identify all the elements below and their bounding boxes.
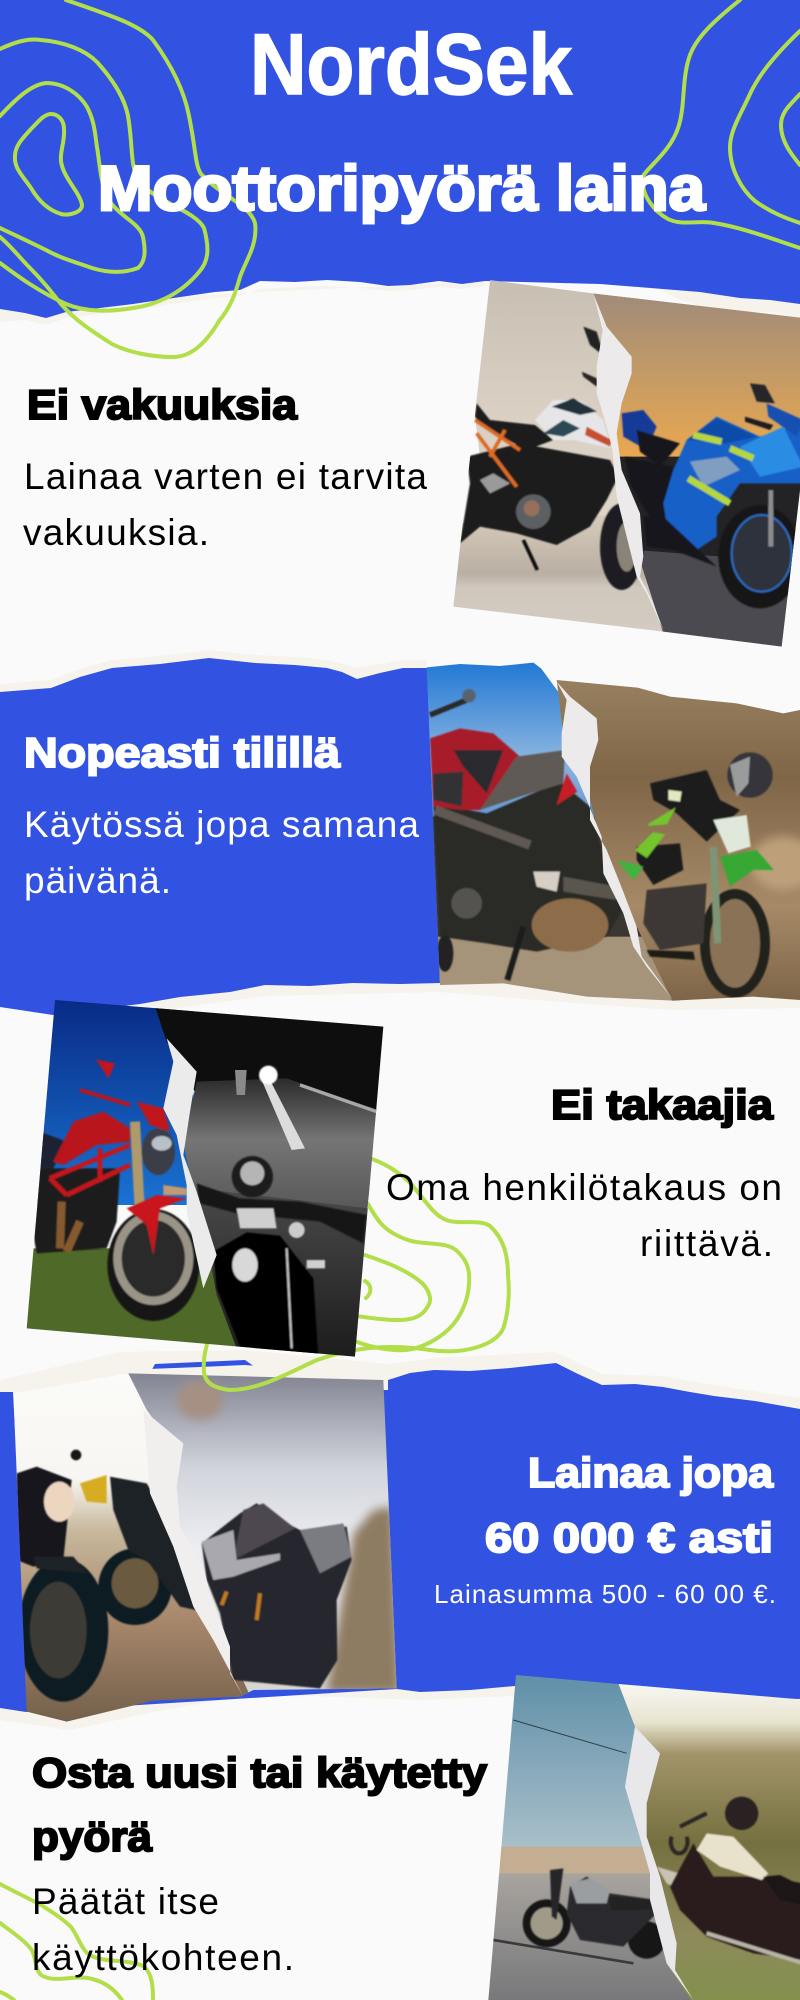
left half: asphalt <box>487 1873 697 2000</box>
body: Käytössä jopa samana <box>24 804 419 845</box>
torn paper strip <box>625 1727 693 2000</box>
right half: trees and sunlight <box>618 1683 800 2000</box>
right half: road <box>183 1078 378 1215</box>
left half: shaded area behind bike <box>432 816 642 949</box>
bike: white tank chopper <box>657 1797 800 1963</box>
left half: blue sky <box>27 998 193 1205</box>
text block: Ei takaajia <box>386 1081 782 1264</box>
decorative contour lines: top left <box>0 0 255 357</box>
distant foliage <box>327 1507 400 1693</box>
logo: NordSek: NordSek <box>250 17 572 113</box>
panel: blue band "Lainaa jopa" <box>0 1350 800 1730</box>
photo: Yamaha and motocross riders <box>420 660 800 1007</box>
bike: green motocross <box>617 752 774 993</box>
body: Lainaa varten ei tarvita <box>24 456 427 497</box>
left half: road <box>438 936 680 1001</box>
photo: parked motorcycles and sport bike <box>10 1370 400 1723</box>
heading: Nopeasti tilillä <box>24 729 341 776</box>
bike: red Ducati <box>33 1059 199 1321</box>
left half: horizon and grass <box>27 1248 240 1348</box>
sky: warm haze spot <box>177 1380 223 1420</box>
text block: Lainaa jopa <box>434 1449 776 1609</box>
text block: Lainaa jopa: 60 000 € asti <box>485 1514 773 1561</box>
text block: Nopeasti tilillä: päivänä. <box>24 860 171 901</box>
panel: blue band "Nopeasti tilillä" <box>0 650 800 1018</box>
photo: motorcycles on road and by trees <box>487 1673 800 2000</box>
left half: dry grass horizon <box>499 1846 650 1874</box>
left half: blue sky <box>487 1673 653 1850</box>
left half: sky <box>426 662 594 826</box>
bike: grey sport bike <box>202 1503 352 1688</box>
text block: Ei vakuuksia: vakuuksia. <box>23 512 209 553</box>
road markings and glow <box>235 1066 377 1150</box>
heading: Osta uusi tai käytetty <box>32 1749 488 1796</box>
bike: blue Suzuki <box>622 383 800 608</box>
dust cloud: lighter plume <box>750 837 800 890</box>
panel: blue header band <box>0 0 800 325</box>
body: Päätät itse <box>32 1881 219 1922</box>
decorative contour lines: middle <box>204 1159 509 1390</box>
torn paper strip <box>163 1038 217 1288</box>
body: Oma henkilötakaus on <box>386 1167 782 1208</box>
torn paper strip <box>557 682 673 1000</box>
road shadow <box>493 1940 633 1963</box>
text block: Osta uusi tai käytetty pyörä <box>32 1749 488 1978</box>
left half: bright sky and paved ground <box>10 1373 253 1723</box>
decorative contour lines: top right <box>643 0 800 248</box>
torn paper strip <box>143 1410 243 1697</box>
right half: hazy sky <box>127 1370 400 1697</box>
body: Lainasumma 500 - 60 00 €. <box>434 1579 776 1609</box>
left half: concrete wall <box>475 280 618 516</box>
photo: Ducati and black-and-white road view <box>27 998 385 1358</box>
bike: grey classic <box>523 1868 665 1959</box>
right half: dark trees <box>155 1007 385 1115</box>
decorative contour lines: bottom left <box>0 1884 153 2000</box>
heading: Lainaa jopa <box>528 1449 774 1496</box>
text block: Osta uusi tai käytetty pyörä: pyörä <box>32 1813 153 1860</box>
title: Moottoripyörä laina <box>98 154 706 224</box>
right half: sunset sky <box>593 293 800 470</box>
right half: dark shaded area under the bike <box>617 457 800 570</box>
bike: black motorcycle in foreground <box>197 1156 367 1358</box>
left half: concrete floor <box>453 513 667 633</box>
right half: dust cloud <box>557 680 800 1003</box>
bike: dark cruisers <box>17 1450 203 1702</box>
heading: Ei vakuuksia <box>27 381 298 428</box>
bike: white and orange KTM <box>460 327 643 590</box>
right half: lower area <box>197 1188 368 1358</box>
power line <box>513 1720 627 1753</box>
text block: Ei vakuuksia <box>23 381 427 553</box>
heading: Ei takaajia <box>551 1081 774 1128</box>
bike: red Yamaha <box>430 689 627 980</box>
right half: cobblestones <box>637 550 800 648</box>
text block: Ei takaajia: riittävä. <box>640 1223 773 1264</box>
torn paper strip <box>593 293 664 632</box>
photo: KTM and Suzuki motorcycles <box>453 280 800 648</box>
text block: Nopeasti tilillä <box>24 729 419 901</box>
text block: Osta uusi tai käytetty pyörä: käyttökohteen. <box>32 1937 294 1978</box>
